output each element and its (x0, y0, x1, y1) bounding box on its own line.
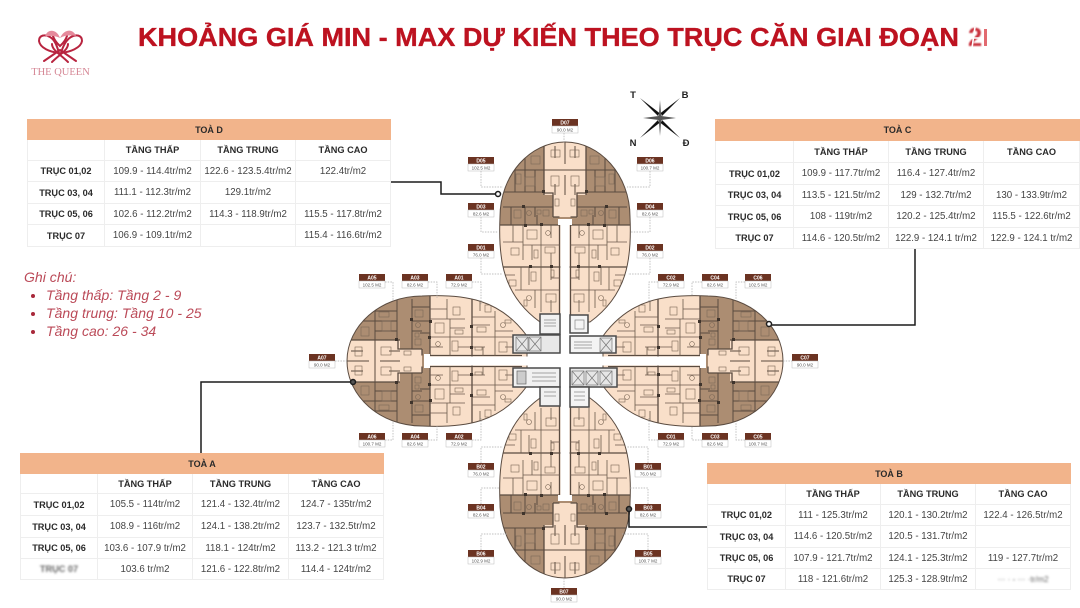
label A06: 100.7 M2 (363, 442, 382, 446)
label C04: 82.6 M2 (707, 282, 724, 288)
unit leader lines (335, 133, 792, 588)
label A03: A03 (410, 276, 420, 282)
table: Toà A: 124.1 - 138.2tr/m2 (201, 521, 280, 532)
label D01: D01 (476, 246, 486, 252)
table: Toà B: 114.6 - 120.5tr/m2 (794, 531, 872, 542)
label B07 (551, 588, 577, 602)
note: floor ranges (24, 269, 202, 339)
table: Toà D: 114.3 - 118.9tr/m2 (209, 208, 287, 220)
table: Toà D: 115.4 - 116.6tr/m2 (304, 230, 382, 241)
table: Toà A: 114.4 - 124tr/m2 (301, 564, 371, 574)
table: Toà D: TẦNG TRUNG (217, 145, 279, 155)
table: Toà A: 121.4 - 132.4tr/m2 (201, 499, 280, 510)
table: Toà A: 118.1 - 124tr/m2 (205, 542, 276, 554)
table: Toà A: TẦNG TRUNG (210, 478, 271, 488)
label B06: B06 (476, 552, 486, 558)
compass rose: T (630, 90, 636, 101)
label B06 (468, 550, 494, 564)
label D04 (637, 203, 663, 217)
table: Toà A: TRỤC 03, 04 (32, 522, 86, 532)
label B05 (635, 550, 661, 564)
label A05: 102.5 M2 (363, 282, 382, 288)
table: Toà A: 113.2 - 121.3 tr/m2 (295, 542, 377, 554)
table: Toà D: TẦNG CAO (319, 145, 368, 155)
table: Toà A: 124.7 - 135tr/m2 (300, 499, 372, 510)
table: Toà D: 106.9 - 109.1tr/m2 (113, 230, 192, 241)
table: Toà A: TOÀ A (188, 458, 216, 468)
table: Toà B: 107.9 - 121.7tr/m2 (793, 552, 873, 564)
table: Toà B: TRỤC 03, 04 (720, 532, 773, 542)
table: Toà B: TẦNG CAO (999, 489, 1048, 499)
table: Toà D: 111.1 - 112.3tr/m2 (114, 187, 191, 198)
label D05: 102.5 M2 (472, 166, 491, 170)
label A04: A04 (410, 434, 420, 440)
table: Toà D: 122.4tr/m2 (320, 166, 366, 176)
table: Toà B: 125.3 - 128.9tr/m2 (888, 574, 968, 584)
label B03 (635, 504, 661, 518)
table: Toà A: 108.9 - 116tr/m2 (110, 521, 180, 532)
label A02: 72.9 M2 (451, 442, 468, 446)
label C03 (702, 433, 728, 447)
label A03 (402, 274, 428, 288)
table: Toà C: TRỤC 07 (735, 233, 774, 243)
logo: The Queen (31, 31, 90, 78)
table: Toà B: TRỤC 05, 06 (720, 553, 773, 563)
label A02: A02 (454, 434, 464, 440)
label A07: A07 (317, 356, 327, 362)
label C05: 100.7 M2 (749, 442, 768, 446)
table: Toà C: 130 - 133.9tr/m2 (996, 190, 1067, 200)
table: Toà A: 105.5 - 114tr/m2 (110, 499, 180, 510)
label D07: 90.0 M2 (557, 128, 574, 132)
label C02: 72.9 M2 (663, 282, 680, 288)
label A05: A05 (367, 276, 377, 282)
label C03: 82.6 M2 (707, 442, 724, 446)
floor plan: wing D (495, 135, 635, 330)
label C03: C03 (710, 434, 720, 440)
label C02 (658, 274, 684, 288)
label C07 (792, 354, 818, 368)
table: Toà C: 108 - 119tr/m2 (810, 211, 872, 222)
label D06: D06 (645, 158, 655, 164)
connector: table C to wing C (766, 248, 915, 326)
title: 2 (968, 24, 982, 52)
label C07: C07 (800, 356, 810, 362)
label B01: 76.0 M2 (640, 472, 657, 476)
table: Toà C: 116.4 - 127.4tr/m2 (897, 168, 975, 179)
label A05 (359, 274, 385, 288)
table: Toà C: 122.9 - 124.1 tr/m2 (895, 232, 977, 244)
table: Toà A: 121.6 - 122.8tr/m2 (201, 564, 280, 574)
table: Toà D: TẦNG THẤP (126, 145, 179, 155)
label B06: 102.9 M2 (472, 558, 491, 564)
label B05: 100.7 M2 (639, 558, 658, 564)
table: Toà C: TRỤC 05, 06 (728, 212, 781, 222)
label C05 (745, 433, 771, 447)
label D07: D07 (560, 120, 570, 126)
table: Toà C: 114.6 - 120.5tr/m2 (802, 232, 880, 244)
table: Toà C: 113.5 - 121.5tr/m2 (802, 190, 880, 200)
compass rose: Đ (683, 138, 690, 149)
table: Toà D: TRỤC 05, 06 (39, 209, 93, 219)
table: Toà A: 103.6 tr/m2 (120, 564, 170, 574)
table: Toà C: 122.9 - 124.1 tr/m2 (991, 232, 1072, 244)
table: Toà D (27, 119, 391, 247)
table: Toà D: TRỤC 01,02 (40, 166, 92, 176)
table: Toà A: TRỤC 01,02 (33, 500, 85, 510)
table: Toà C: 129 - 132.7tr/m2 (900, 190, 972, 200)
label C07: 90.0 M2 (797, 362, 814, 368)
table: Toà C: TẦNG TRUNG (905, 146, 967, 156)
label C01 (658, 433, 684, 447)
table: Toà C: TRỤC 01,02 (729, 168, 780, 178)
label B05: B05 (643, 552, 653, 558)
floor plan: wing C (595, 291, 790, 431)
table: Toà C (715, 119, 1080, 249)
table: Toà A (20, 453, 384, 580)
table: Toà C: TẦNG THẤP (814, 146, 868, 156)
label D05: D05 (476, 158, 486, 164)
central lift and stair core (513, 314, 617, 407)
label C06 (745, 274, 771, 288)
logo: The Queen: THE QUEEN (31, 67, 90, 78)
label D02 (637, 244, 663, 258)
label D07 (552, 119, 578, 133)
table: Toà A: TẦNG CAO (312, 478, 360, 488)
table: Toà B: TRỤC 01,02 (721, 510, 772, 520)
floor plan: wing A (340, 291, 535, 431)
table: Toà B: 120.5 - 131.7tr/m2 (888, 531, 968, 542)
label D01 (468, 244, 494, 258)
table: Toà C: TẦNG CAO (1007, 146, 1056, 156)
label B04 (468, 504, 494, 518)
table: Toà D: TRỤC 03, 04 (39, 188, 93, 198)
note: floor ranges: Tầng trung: Tầng 10 - 25 (46, 305, 202, 321)
table: Toà A: 123.7 - 132.5tr/m2 (296, 521, 376, 532)
table: Toà B: TẦNG TRUNG (897, 489, 959, 499)
label B04: B04 (476, 506, 486, 512)
label B04: 82.6 M2 (473, 512, 490, 518)
label A04 (402, 433, 428, 447)
table: Toà C: 115.5 - 122.6tr/m2 (992, 211, 1071, 222)
label B07: B07 (559, 590, 569, 596)
label A01 (446, 274, 472, 288)
label A07 (309, 354, 335, 368)
label C06: 102.5 M2 (749, 282, 768, 288)
note: floor ranges: Tầng cao: 26 - 34 (46, 323, 156, 339)
label B01: B01 (643, 464, 653, 470)
table: Toà C: 109.9 - 117.7tr/m2 (802, 168, 880, 179)
label A07: 90.0 M2 (314, 362, 331, 368)
table: Toà D: 102.6 - 112.2tr/m2 (113, 208, 192, 220)
label A06 (359, 433, 385, 447)
table: Toà A: 103.6 - 107.9 tr/m2 (104, 542, 186, 554)
label D01: 76.0 M2 (473, 252, 490, 258)
label B02: 76.0 M2 (473, 472, 490, 476)
label D06 (637, 157, 663, 171)
label A01: 72.9 M2 (451, 282, 468, 288)
table: Toà B: 124.1 - 125.3tr/m2 (888, 552, 968, 564)
title: KHOẢNG GIÁ MIN - MAX DỰ KIẾN THEO TRỤC CĂN GIAI ĐOẠN (138, 22, 959, 52)
connector: table D to wing D (390, 182, 500, 196)
label D04: D04 (645, 204, 655, 210)
table: Toà C: TOÀ C (884, 125, 911, 135)
label A01: A01 (454, 276, 464, 282)
table: Toà D: TRỤC 07 (47, 230, 85, 240)
table: Toà A: TRỤC 05, 06 (32, 543, 86, 553)
label D02: 76.0 M2 (642, 252, 659, 258)
label C01: 72.9 M2 (663, 442, 680, 446)
label B03: 82.6 M2 (640, 512, 657, 518)
compass rose (630, 90, 690, 149)
label C06: C06 (753, 276, 763, 282)
table: Toà D: 109.9 - 114.4tr/m2 (113, 166, 192, 176)
label B03: B03 (643, 506, 653, 512)
label B01 (635, 463, 661, 477)
connector: table B to wing B (626, 506, 707, 527)
label B02 (468, 463, 494, 477)
table: Toà B: 120.1 - 130.2tr/m2 (888, 510, 968, 520)
label D04: 82.6 M2 (642, 212, 659, 216)
label D02: D02 (645, 246, 655, 252)
compass rose: B (682, 90, 689, 101)
label A04: 82.6 M2 (407, 442, 424, 446)
table: Toà B: ··· · - ··· ·tr/m2 (997, 574, 1049, 584)
label B07: 90.0 M2 (556, 596, 573, 602)
table: Toà C: 120.2 - 125.4tr/m2 (896, 211, 976, 222)
label A02 (446, 433, 472, 447)
label D03: D03 (476, 204, 486, 210)
note: floor ranges: Tầng thấp: Tầng 2 - 9 (46, 287, 181, 303)
label C01: C01 (666, 434, 676, 440)
note: floor ranges: Ghi chú: (24, 269, 76, 285)
label C02: C02 (666, 276, 676, 282)
label A06: A06 (367, 434, 377, 440)
label C04 (702, 274, 728, 288)
table: Toà D: TOÀ D (195, 124, 223, 134)
label B02: B02 (476, 464, 486, 470)
label D03: 82.6 M2 (473, 212, 490, 216)
table: Toà A: TẦNG THẤP (118, 478, 172, 488)
table: Toà B: 118 - 121.6tr/m2 (798, 574, 868, 584)
table: Toà B: TOÀ B (875, 468, 903, 478)
table: Toà C: TRỤC 03, 04 (728, 190, 781, 200)
table: Toà B: 119 - 127.7tr/m2 (988, 552, 1058, 564)
table: Toà B: 122.4 - 126.5tr/m2 (983, 510, 1063, 520)
label A03: 82.6 M2 (407, 282, 424, 288)
table: Toà D: 122.6 - 123.5.4tr/m2 (204, 166, 292, 176)
label D06: 100.7 M2 (641, 166, 660, 170)
label C05: C05 (753, 434, 763, 440)
connector: table A to wing A (201, 380, 356, 453)
label C04: C04 (710, 276, 720, 282)
table: Toà A: TRỤC 07 (40, 564, 78, 574)
table: Toà B (707, 463, 1071, 590)
label D03 (468, 203, 494, 217)
table: Toà D: 115.5 - 117.8tr/m2 (304, 208, 382, 220)
table: Toà D: 129.1tr/m2 (225, 187, 271, 198)
table: Toà B: TRỤC 07 (727, 574, 766, 584)
compass rose: N (630, 138, 637, 149)
table: Toà B: 111 - 125.3tr/m2 (798, 510, 868, 520)
table: Toà B: TẦNG THẤP (806, 489, 860, 499)
floor plan: wing B (495, 390, 635, 585)
label D05 (468, 157, 494, 171)
unit labels (309, 119, 818, 602)
